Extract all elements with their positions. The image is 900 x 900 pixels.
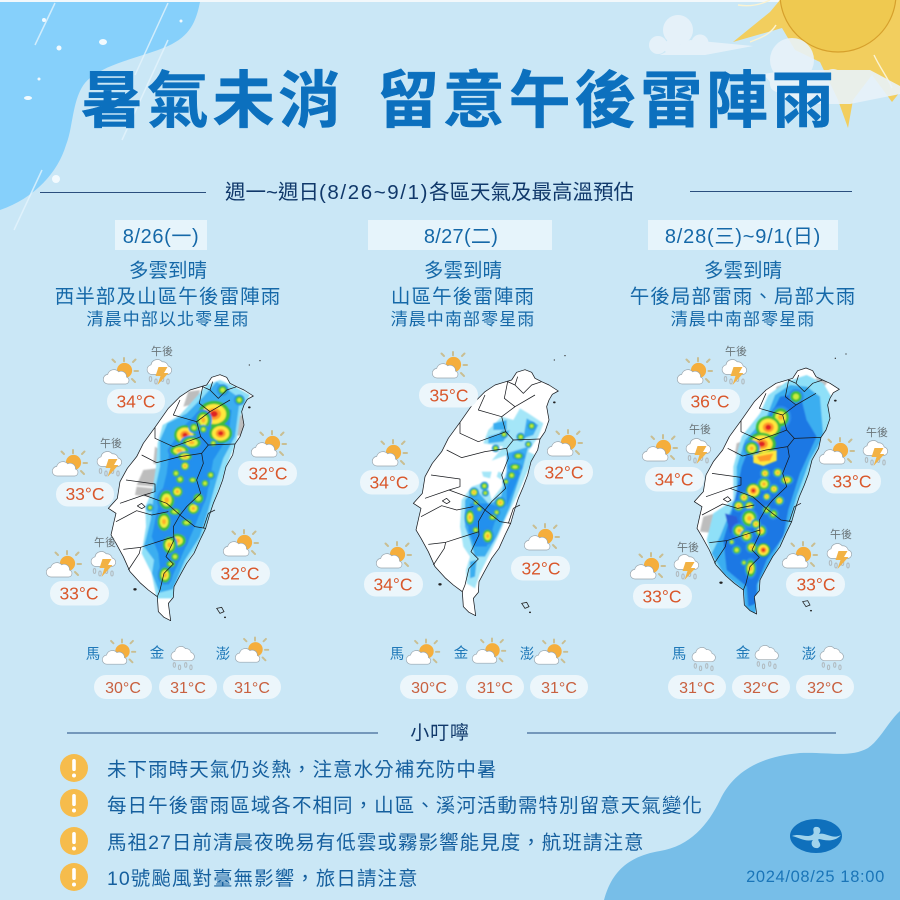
outlying islands 8/27: 31°C xyxy=(541,680,577,697)
panel: 8/26 heading: 西半部及山區午後雷陣雨 xyxy=(55,286,281,308)
reminder 4 xyxy=(60,863,418,891)
outlying islands 8/27: 30°C xyxy=(411,680,447,697)
title: 暑氣未消 xyxy=(81,67,344,136)
temperatures 8/26: 32°C xyxy=(220,564,260,584)
outlying islands 8/28-9/1: 澎 xyxy=(802,646,816,663)
temperatures 8/27: 32°C xyxy=(544,462,584,482)
panel: 8/28-9/1 heading: 多雲到晴 xyxy=(704,260,782,282)
temperatures 8/28-9/1 xyxy=(633,389,881,608)
reminder 3: 馬祖27日前清晨夜晚易有低雲或霧影響能見度，航班請注意 xyxy=(107,832,645,854)
icons: thunderstorm 8/26: 午後 xyxy=(94,535,116,549)
icons: thunderstorm 8/28-9/1: 午後 xyxy=(725,344,747,358)
temperatures 8/26 xyxy=(50,389,297,606)
temperatures 8/27: 34°C xyxy=(369,472,409,492)
reminder 1: 未下雨時天氣仍炎熱，注意水分補充防中暑 xyxy=(107,759,497,781)
temperatures 8/28-9/1: 33°C xyxy=(832,472,872,492)
title xyxy=(81,67,838,136)
temperatures 8/27: 34°C xyxy=(373,574,413,594)
outlying islands 8/27: 31°C xyxy=(477,680,513,697)
blue wave top-left xyxy=(0,2,200,230)
icons: thunderstorm 8/28-9/1: 午後 xyxy=(677,540,699,554)
panel: 8/26 heading xyxy=(55,220,281,329)
outlying islands 8/27 xyxy=(390,638,588,699)
panel: 8/28-9/1 heading: 午後局部雷雨、局部大雨 xyxy=(630,286,856,308)
temperatures 8/27: 32°C xyxy=(521,558,561,578)
outlying islands 8/28-9/1 xyxy=(668,645,854,699)
icons: thunderstorm 8/26: 午後 xyxy=(100,436,122,450)
panel: 8/26 heading: 8/26(一) xyxy=(123,226,199,248)
outlying islands 8/26: 金 xyxy=(150,645,165,662)
icons: thunderstorm 8/26 xyxy=(91,344,173,577)
icon: decorative sun with clouds xyxy=(649,0,900,128)
title: 留意午後雷陣雨 xyxy=(377,67,838,136)
outlying islands 8/28-9/1: 馬 xyxy=(672,647,686,663)
temperatures 8/27: 35°C xyxy=(429,386,469,406)
panel: 8/26 heading: 清晨中部以北零星雨 xyxy=(87,310,249,329)
panel: 8/28-9/1 heading: 清晨中南部零星雨 xyxy=(671,310,815,329)
outlying islands 8/28-9/1: 金 xyxy=(736,645,751,662)
outlying islands 8/27: 馬 xyxy=(390,647,404,663)
panel: 8/28-9/1 heading: 8/28(三)~9/1(日) xyxy=(665,226,821,248)
outlying islands 8/28-9/1: 32°C xyxy=(743,680,779,697)
temperatures 8/27 xyxy=(360,383,593,596)
temperatures 8/26: 34°C xyxy=(116,392,156,412)
panel: 8/27 heading: 多雲到晴 xyxy=(424,260,502,282)
panel: 8/27 heading: 8/27(二) xyxy=(424,226,498,248)
outlying islands 8/26: 澎 xyxy=(216,646,230,663)
temperatures 8/26: 32°C xyxy=(248,464,288,484)
panel: 8/28-9/1 heading xyxy=(630,220,856,329)
outlying islands 8/27: 澎 xyxy=(520,646,534,663)
outlying islands 8/26: 30°C xyxy=(105,680,141,697)
icons: thunderstorm 8/28-9/1: 午後 xyxy=(830,527,852,541)
reminder 2: 每日午後雷雨區域各不相同，山區、溪河活動需特別留意天氣變化 xyxy=(107,795,703,817)
map: Taiwan rainfall 8/28-9/1 xyxy=(694,353,847,615)
outlying islands 8/26 xyxy=(86,638,281,699)
outlying islands 8/26: 31°C xyxy=(170,680,206,697)
blue wave bottom-right xyxy=(604,711,900,900)
panel: 8/26 heading: 多雲到晴 xyxy=(129,260,207,282)
panel: 8/27 heading: 清晨中南部零星雨 xyxy=(391,310,535,329)
icons: thunderstorm 8/28-9/1: 午後 xyxy=(866,425,888,439)
reminder 4: 10號颱風對臺無影響，旅日請注意 xyxy=(107,868,418,890)
icons: thunderstorm 8/28-9/1 xyxy=(674,344,888,580)
outlying islands 8/28-9/1: 31°C xyxy=(679,680,715,697)
logo xyxy=(790,819,842,853)
temperatures 8/26: 33°C xyxy=(65,484,105,504)
timestamp: 2024/08/25 18:00 xyxy=(746,868,885,886)
outlying islands 8/26: 馬 xyxy=(86,647,100,663)
outlying islands 8/28-9/1: 32°C xyxy=(807,680,843,697)
reminders heading: 小叮嚀 xyxy=(410,722,470,744)
temperatures 8/28-9/1: 33°C xyxy=(796,574,836,594)
panel: 8/27 heading xyxy=(368,220,552,329)
icons: thunderstorm 8/26: 午後 xyxy=(151,344,173,358)
icons: sun-cloud 8/28-9/1 xyxy=(630,358,854,579)
temperatures 8/28-9/1: 36°C xyxy=(690,392,730,412)
map: Taiwan rainfall 8/27 xyxy=(413,355,566,616)
outlying islands 8/26: 31°C xyxy=(234,680,270,697)
temperatures 8/28-9/1: 33°C xyxy=(642,586,682,606)
icons: sun-cloud 8/27 xyxy=(372,352,582,568)
icons: sun-cloud 8/26 xyxy=(46,358,286,577)
temperatures 8/26: 33°C xyxy=(59,584,99,604)
icons: thunderstorm 8/28-9/1: 午後 xyxy=(689,422,711,436)
temperatures 8/28-9/1: 34°C xyxy=(654,470,694,490)
subtitle with rules: 週一~週日(8/26~9/1)各區天氣及最高溫預估 xyxy=(225,181,634,204)
panel: 8/27 heading: 山區午後雷陣雨 xyxy=(391,286,535,308)
outlying islands 8/27: 金 xyxy=(454,645,469,662)
map: Taiwan rainfall 8/26 xyxy=(108,360,261,621)
